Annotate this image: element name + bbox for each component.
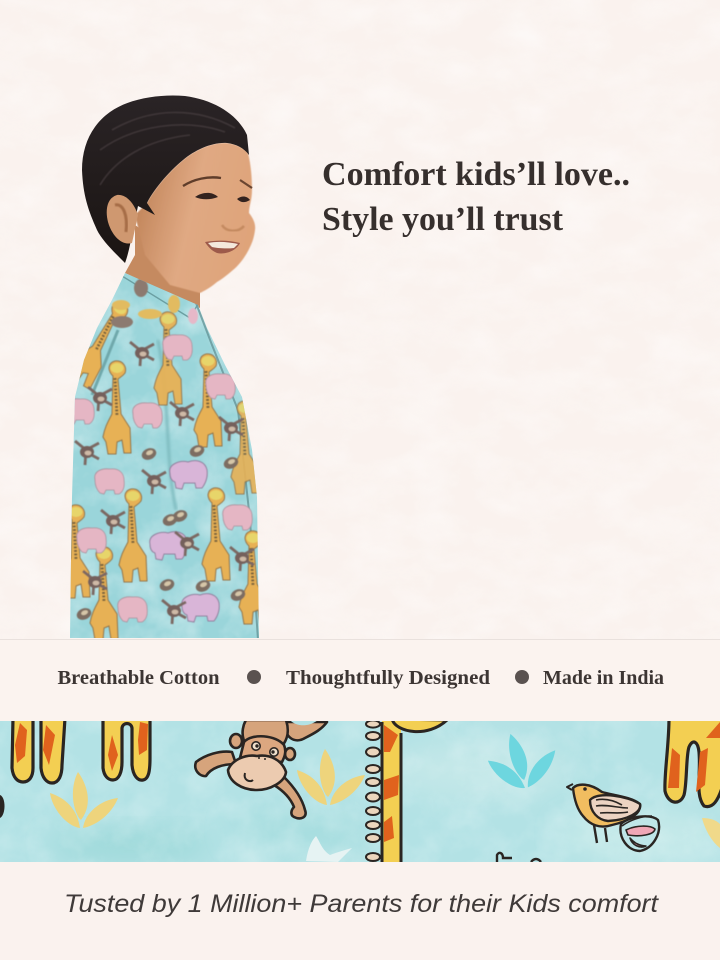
boy: smile — [205, 241, 240, 253]
bullet — [247, 670, 261, 684]
giraffe orange patches left — [15, 722, 148, 771]
kurta body — [70, 273, 259, 638]
photo: smiling boy in printed kurta — [70, 96, 259, 638]
bird illustration — [567, 784, 659, 851]
boy: eyes and brows — [183, 177, 252, 202]
heading: Comfort kids’ll love.. — [322, 156, 630, 193]
leaf: blue — [483, 725, 562, 795]
boy: ear — [107, 195, 138, 244]
monkeys on kurta — [75, 342, 254, 624]
leaf: yellow right — [297, 749, 365, 805]
giraffe neck with mane — [366, 719, 447, 862]
leaf: yellow left — [50, 772, 118, 828]
small figure at bottom — [497, 853, 541, 862]
label: Made in India: Made in India — [543, 667, 664, 689]
giraffe orange patches right — [668, 722, 720, 792]
panel: trust footer — [0, 862, 720, 960]
panel: feature band — [0, 640, 720, 721]
panel: fabric print strip — [0, 718, 720, 863]
hippos on kurta — [65, 335, 252, 622]
leaf: yellow right edge — [702, 818, 720, 848]
monkey face details — [245, 742, 278, 781]
giraffe legs right — [665, 718, 720, 807]
collar print — [111, 279, 198, 328]
boy: nose shading — [222, 225, 244, 231]
label: Thoughtfully Designed: Thoughtfully Designed — [286, 667, 490, 689]
monkey illustration — [195, 720, 327, 818]
boy: face — [135, 143, 255, 293]
heading: Style you’ll trust — [322, 201, 564, 238]
label: Breathable Cotton: Breathable Cotton — [58, 667, 220, 689]
giraffe legs left — [12, 718, 150, 783]
boy: hair — [82, 96, 249, 263]
small motifs on kurta — [75, 443, 247, 622]
boy: neck — [125, 225, 215, 308]
white leaf — [306, 836, 352, 862]
giraffes on kurta — [70, 306, 259, 638]
heading — [322, 156, 630, 238]
bullet — [515, 670, 529, 684]
trust statement: Tusted by 1 Million+ Parents for their Kids comfort — [64, 890, 659, 918]
boy: hair sheen — [100, 112, 235, 185]
left edge spot — [0, 795, 4, 818]
